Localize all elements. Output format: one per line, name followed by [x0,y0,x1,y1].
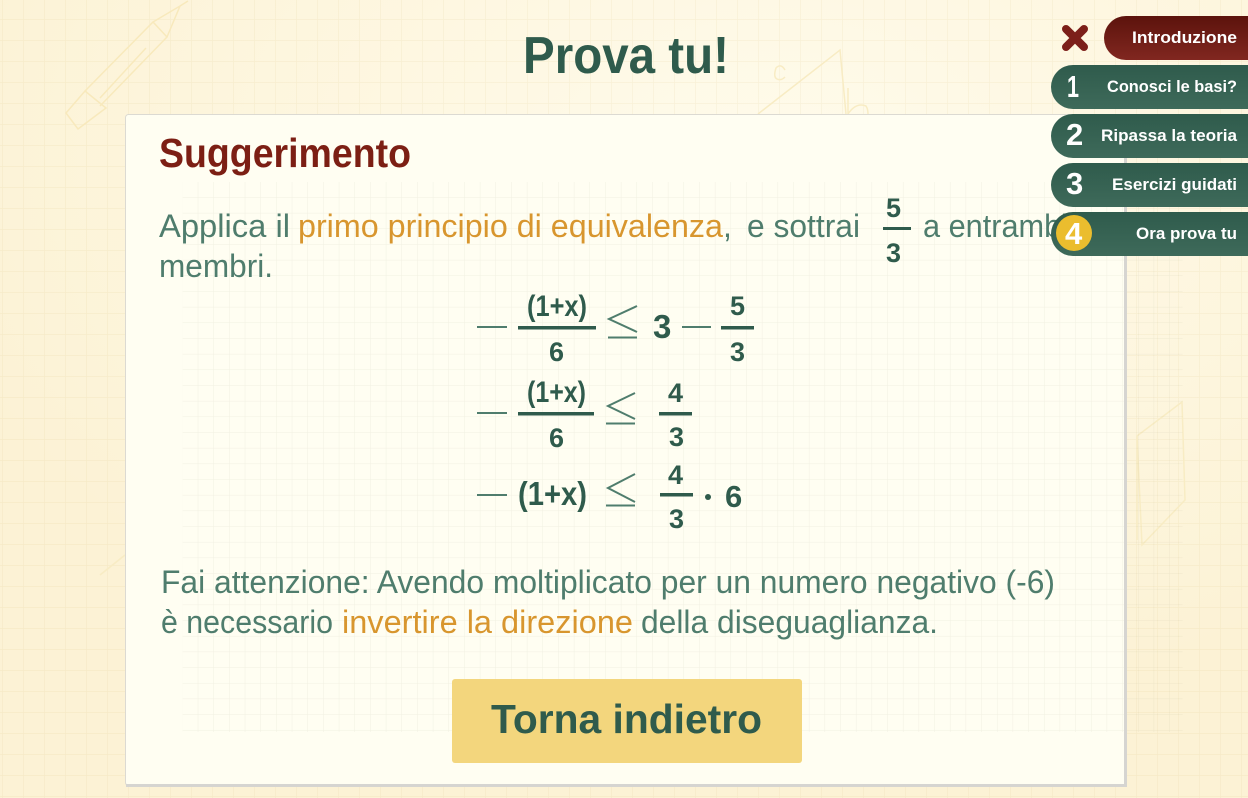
nav item: 2 Ripassa la teoria [1051,114,1248,158]
equation: line 2: 4 [668,378,683,408]
panel: suggerimento card [126,114,1183,787]
nav item: 1 Conosci le basi?: 1 [1067,69,1079,104]
equation: line 3: 3 [669,504,684,534]
button: Torna indietro [452,679,802,763]
text block: hint sentence: 5 [886,193,901,223]
nav item: 4 Ora prova tu: Ora prova tu [1136,224,1237,243]
text block: warning: della diseguaglianza. [641,604,938,640]
text block: warning: Fai attenzione: Avendo moltiplicato per un numero negativo (-6) [161,564,1055,600]
decorative school sketches [100,50,1185,575]
nav item: 4 Ora prova tu: 4 [1065,216,1083,251]
text block: hint sentence: a entrambi [923,208,1068,244]
text block: hint sentence: e sottrai [747,208,860,244]
nav item: Introduzione: Introduzione [1132,28,1237,47]
text block: warning: è necessario [161,604,333,640]
equation: line 2 [477,376,692,453]
equation: line 1 [477,290,754,367]
icon: pencil sketch [66,1,188,129]
text block: hint sentence: 3 [886,238,901,268]
equation: line 3: 4 [668,460,683,490]
text block: hint sentence: primo principio di equivalenza [298,208,723,244]
nav item: 1 Conosci le basi? [1051,65,1248,109]
nav item: 1 Conosci le basi?: Conosci le basi? [1107,77,1237,96]
text block: warning: invertire la direzione [342,604,633,640]
equation: line 1: 5 [730,291,745,321]
text block: hint sentence [159,193,1068,284]
nav item: 2 Ripassa la teoria: Ripassa la teoria [1101,126,1238,145]
heading: Suggerimento: Suggerimento [159,130,411,176]
text block: hint sentence: Applica il [159,208,290,244]
equation: line 1: 3 [730,337,745,367]
equation: line 3: (1+x) [518,475,587,512]
equation: line 2: (1+x) [527,376,586,409]
text block: hint sentence: membri. [159,248,273,284]
nav item: 3 Esercizi guidati: 3 [1066,166,1083,201]
nav item: 4 Ora prova tu [1051,212,1248,256]
heading: Prova tu!: Prova tu! [523,27,729,85]
equation: line 1: 6 [549,337,564,367]
navigation menu [1051,16,1248,256]
text block: warning [161,564,1055,640]
nav item: Introduzione [1104,16,1248,60]
equation: line 2: 3 [669,422,684,452]
text block: hint sentence: , [723,208,732,244]
equation: line 1: (1+x) [527,290,587,323]
equation: line 3 [477,460,742,534]
nav item: 3 Esercizi guidati [1051,163,1248,207]
nav item: 3 Esercizi guidati: Esercizi guidati [1112,175,1237,194]
equation: line 3: 6 [725,479,742,514]
button: Torna indietro: Torna indietro [491,696,762,742]
nav item: 2 Ripassa la teoria: 2 [1066,117,1083,152]
icon: close X [1066,29,1084,47]
equation: line 1: 3 [653,308,671,345]
equation: line 2: 6 [549,423,564,453]
